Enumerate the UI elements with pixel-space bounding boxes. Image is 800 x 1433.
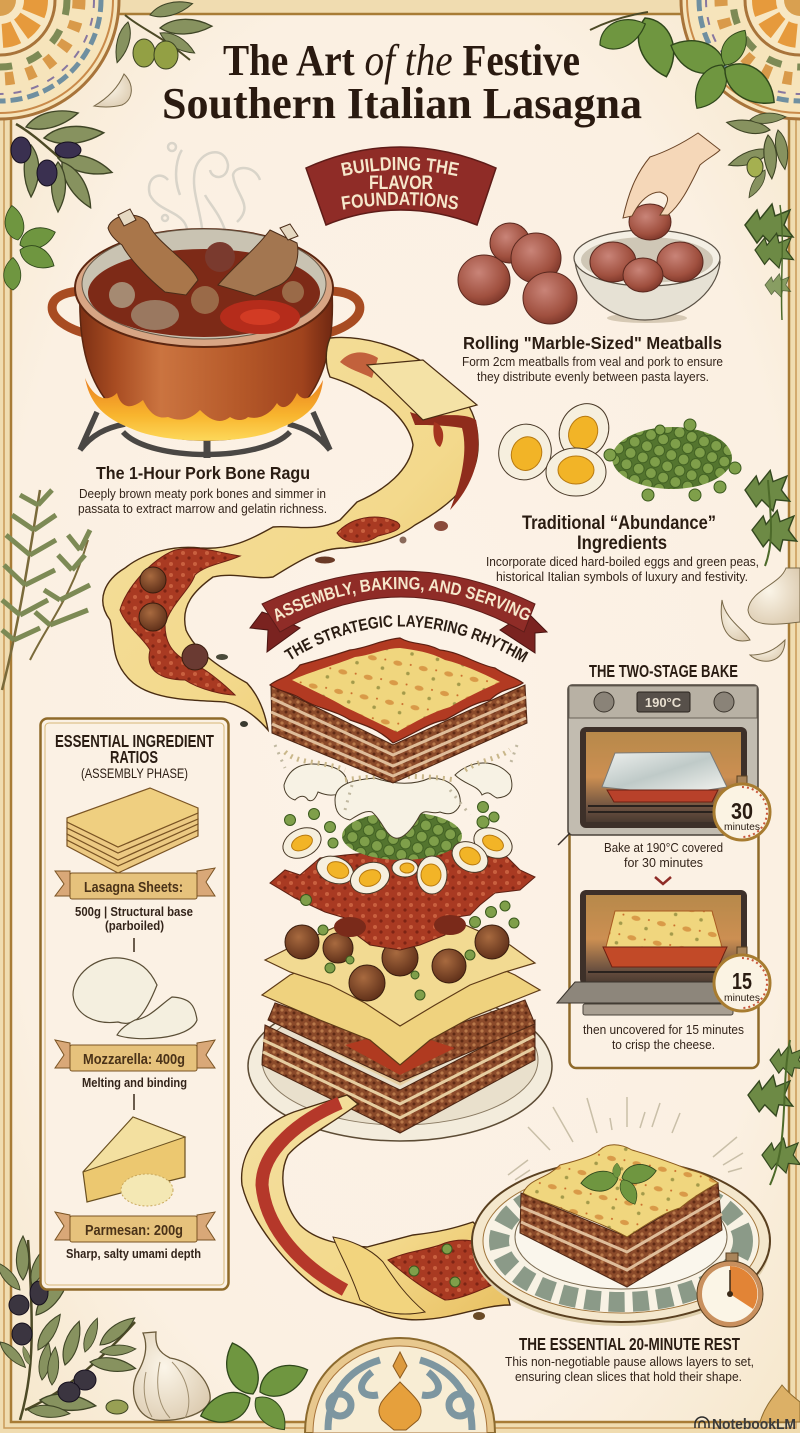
- bottom right corner ornament: [760, 1385, 800, 1422]
- text: stage one: [604, 840, 723, 870]
- sauce with meatballs: [120, 548, 240, 695]
- ribbon label: lasagna sheets: [55, 868, 215, 899]
- right parsley lower: [748, 1040, 800, 1185]
- heading and text: abundance ingredients: Incorporate diced hard-boiled eggs and green peas,: [486, 554, 759, 569]
- sauce trace on right edge: [410, 412, 478, 510]
- left rosemary branch: [2, 490, 90, 690]
- chunks: [109, 282, 135, 308]
- body: [80, 290, 332, 440]
- garlic and cloves at right: [721, 568, 800, 661]
- lasagna base stack: [262, 1000, 535, 1133]
- text: stage two: to crisp the cheese.: [612, 1037, 715, 1052]
- bones: [108, 215, 198, 295]
- panel heading: ESSENTIAL INGREDIENT: [55, 731, 214, 751]
- crumbs: [315, 556, 335, 564]
- heading and text: pork bone ragu: passata to extract marrow and gelatin richness.: [78, 501, 327, 516]
- ribbon: pasta stream lower: [242, 1095, 510, 1320]
- oven stage one: 190°C: [645, 695, 682, 710]
- meatballs on table: [458, 223, 577, 324]
- heading and text: abundance ingredients: historical Italian symbols of luxury and festivity.: [496, 569, 748, 584]
- heading: strategic layering rhythm: THE STRATEGIC LAYERING RHYTHM: [284, 615, 528, 662]
- ribbon label: parmesan: Parmesan: 200g: [85, 1222, 183, 1239]
- text: stage two: [583, 1022, 744, 1052]
- bottom centre tile roundel: [305, 1338, 495, 1433]
- heading and text: twenty minute rest: This non-negotiable pause allows layers to set,: [505, 1354, 754, 1369]
- heading and text: meatballs: Form 2cm meatballs from veal and pork to ensure: [462, 354, 723, 369]
- heading and text: pork bone ragu: [78, 463, 327, 516]
- ribbon label: parmesan: [55, 1212, 215, 1242]
- section ribbon: assembly, baking, and serving: [249, 570, 548, 654]
- title: [162, 36, 642, 128]
- top-left olive sprig: [112, 0, 212, 69]
- pasta sheet lower: [262, 940, 540, 1065]
- heading and text: twenty minute rest: THE ESSENTIAL 20-MINUTE REST: [519, 1334, 740, 1354]
- rim: [75, 229, 333, 347]
- icon: mozzarella: [73, 958, 197, 1039]
- radiating rest lines: [508, 1097, 743, 1180]
- timer: 30 minutes: [714, 776, 770, 840]
- timer: 30 minutes: 30: [731, 798, 753, 824]
- pasta sheet with meatballs: [265, 915, 535, 1026]
- oven stage two: [557, 890, 760, 1015]
- left basil sprig: [2, 204, 59, 290]
- timer: 15 minutes: minutes: [724, 992, 760, 1004]
- boiled eggs: [491, 395, 618, 496]
- right parsley upper: [745, 470, 797, 566]
- icon: parmesan wedge: [83, 1117, 185, 1206]
- heading and text: abundance ingredients: Traditional “Abundance”: [522, 513, 716, 534]
- steam: [149, 143, 260, 252]
- garlic clove near title: [94, 74, 131, 107]
- corner ornament: top-right tile roundel: [681, 0, 800, 119]
- timer: 30 minutes: minutes: [724, 821, 760, 833]
- heading and text: abundance ingredients: Ingredients: [577, 533, 667, 554]
- bottom basil sprig: [196, 1338, 313, 1433]
- eggs and peas layer: [278, 802, 519, 935]
- corner ornament: top-left tile roundel: [0, 0, 119, 119]
- ribbon: pasta stream upper: [103, 337, 478, 730]
- sauce: [88, 249, 320, 337]
- heading and text: pork bone ragu: The 1-Hour Pork Bone Ragu: [96, 463, 310, 483]
- final plated lasagna: [472, 1145, 770, 1326]
- bowl with meatballs and hand: [574, 133, 720, 323]
- text: lasagna sheets note: 500g | Structural base: [75, 904, 193, 919]
- section banner: building the flavor foundations: FOUNDATIONS: [341, 192, 458, 210]
- section ribbon: assembly, baking, and serving: ASSEMBLY, BAKING, AND SERVING: [274, 577, 531, 622]
- text: parmesan note: Sharp, salty umami depth: [66, 1246, 201, 1261]
- ribbon label: mozzarella: Mozzarella: 400g: [83, 1051, 185, 1068]
- heading and text: twenty minute rest: ensuring clean slices that hold their shape.: [515, 1369, 742, 1384]
- ribbon label: lasagna sheets: Lasagna Sheets:: [84, 879, 183, 896]
- section banner: building the flavor foundations: FLAVOR: [369, 173, 433, 194]
- panel heading: (ASSEMBLY PHASE): [81, 766, 188, 781]
- central exploded lasagna: bottom plate: [248, 991, 552, 1141]
- panel heading: RATIOS: [110, 747, 158, 767]
- grated cheese: [285, 750, 510, 780]
- icon: stopwatch: [697, 1253, 763, 1327]
- heading: two-stage bake: THE TWO-STAGE BAKE: [589, 661, 738, 681]
- title: Southern Italian Lasagna: [162, 79, 642, 128]
- right parsley sprig: [745, 204, 793, 320]
- timer: 15 minutes: [714, 947, 770, 1011]
- top lasagna block: [270, 638, 527, 783]
- text: mozzarella note: Melting and binding: [82, 1075, 187, 1090]
- mozzarella layer: [275, 745, 517, 838]
- text: stage two: then uncovered for 15 minutes: [583, 1022, 744, 1037]
- left olive branch with black olives: [11, 105, 114, 212]
- red ragu layer: [270, 850, 535, 950]
- heading and text: meatballs: [462, 333, 723, 384]
- panel: essential ingredient ratios: [40, 718, 228, 1290]
- bottom garlic bulb: [133, 1332, 210, 1420]
- handles: [52, 291, 97, 336]
- timer: 15 minutes: 15: [732, 968, 752, 994]
- heading and text: meatballs: they distribute evenly between pasta layers.: [477, 369, 709, 384]
- text: stage one: Bake at 190°C covered: [604, 840, 723, 855]
- section banner: building the flavor foundations: [305, 146, 497, 226]
- oven stage one: [558, 685, 758, 845]
- heading and text: pork bone ragu: Deeply brown meaty pork bones and simmer in: [79, 486, 326, 501]
- panel: two-stage bake: [557, 685, 770, 1068]
- text: stage one: for 30 minutes: [624, 855, 703, 870]
- icon: lasagna sheets: [67, 788, 198, 880]
- stand: [80, 412, 330, 454]
- sauce blob mid ribbon: [337, 517, 400, 542]
- sauce trace near pot: [340, 352, 378, 378]
- heading and text: meatballs: Rolling "Marble-Sized" Meatballs: [463, 333, 722, 353]
- text: lasagna sheets note: (parboiled): [105, 918, 164, 933]
- top-right basil and olive leaves: [590, 11, 791, 200]
- panel heading: [55, 731, 214, 781]
- section banner: building the flavor foundations: BUILDING THE: [341, 157, 460, 176]
- ribbon label: mozzarella: [55, 1040, 215, 1071]
- arrow: stage one to stage two: [655, 877, 671, 884]
- cooking pot with ragu: [52, 209, 360, 458]
- flames: [85, 378, 323, 441]
- heading and text: abundance ingredients: [486, 513, 759, 584]
- heading and text: twenty minute rest: [505, 1334, 754, 1384]
- title: The Art of the Festive: [223, 36, 580, 85]
- pasta sheet on ribbon: [367, 360, 477, 420]
- text: lasagna sheets note: [75, 904, 193, 933]
- bottom-left olive branch: [0, 1236, 138, 1420]
- green peas: [604, 419, 741, 501]
